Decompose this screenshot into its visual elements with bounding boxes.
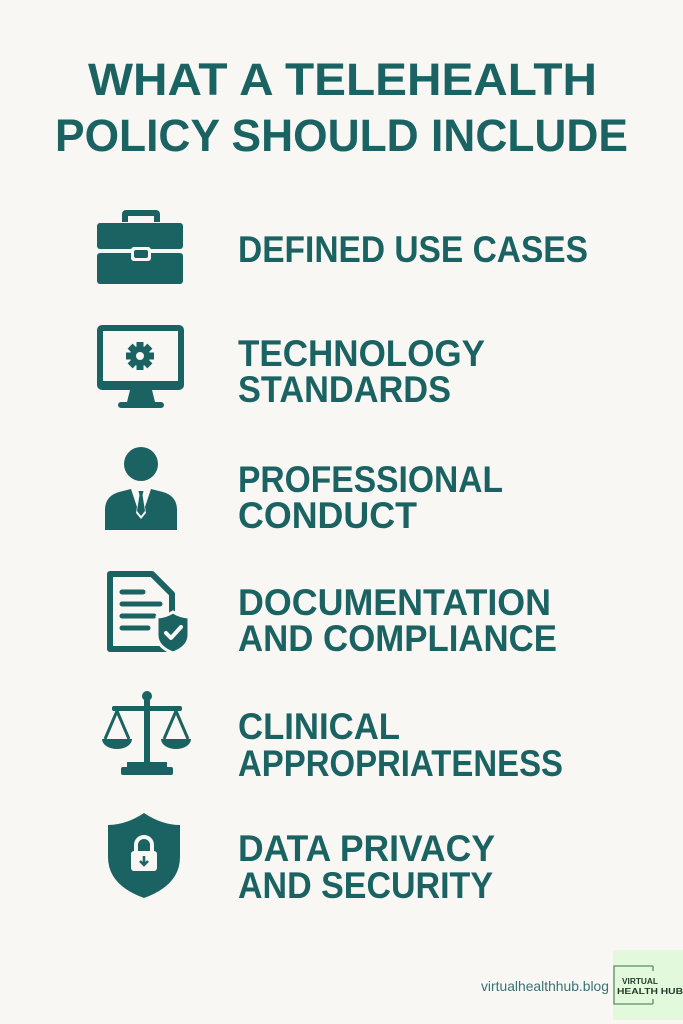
item 5 text: CLINICAL xyxy=(238,706,400,747)
logo: HEALTH HUB xyxy=(617,987,683,996)
icon: briefcase xyxy=(97,210,183,284)
item 5 text xyxy=(238,706,563,784)
item 6 text: DATA PRIVACY xyxy=(238,828,495,869)
item 3 text: PROFESSIONAL xyxy=(238,459,503,500)
item 3 text: CONDUCT xyxy=(238,495,417,536)
logo xyxy=(613,950,683,1020)
item 4 text: AND COMPLIANCE xyxy=(238,618,557,659)
item 5 text: APPROPRIATENESS xyxy=(238,743,563,784)
icon: scales xyxy=(102,691,191,775)
item 2 text: STANDARDS xyxy=(238,369,451,410)
icon: monitor with gear xyxy=(97,325,184,408)
icon: document with shield check xyxy=(110,574,189,653)
item 1 text: DEFINED USE CASES xyxy=(238,229,588,270)
item 2 text: TECHNOLOGY xyxy=(238,333,485,374)
item 6 text: AND SECURITY xyxy=(238,865,493,906)
item 6 text xyxy=(238,828,495,906)
icon: shield lock xyxy=(108,813,180,898)
logo: VIRTUAL xyxy=(622,977,658,986)
title: WHAT A TELEHEALTH xyxy=(88,54,597,105)
item 4 text xyxy=(238,582,557,659)
item 2 text xyxy=(238,333,485,410)
item 4 text: DOCUMENTATION xyxy=(238,582,551,623)
icon: person xyxy=(105,447,177,530)
title: POLICY SHOULD INCLUDE xyxy=(55,110,628,161)
footer url: virtualhealthhub.blog xyxy=(481,978,609,994)
item 3 text xyxy=(238,459,503,536)
title xyxy=(55,54,628,161)
